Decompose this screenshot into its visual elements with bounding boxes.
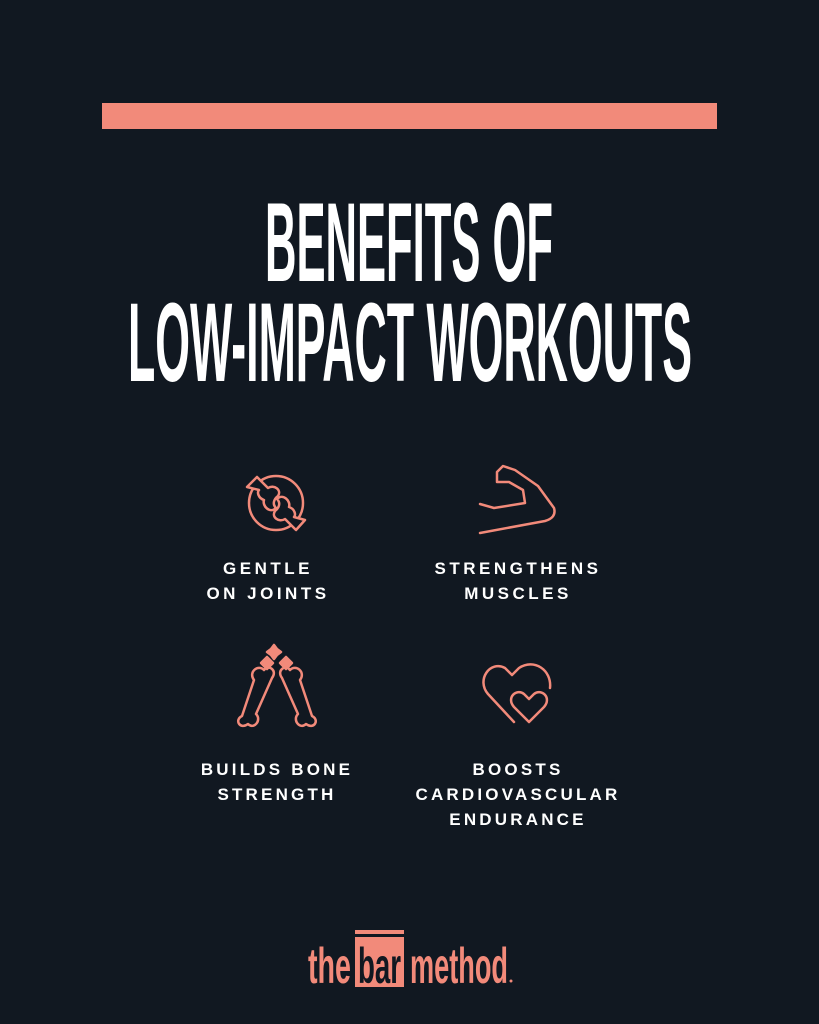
logo: bar	[358, 938, 401, 994]
logo: method	[410, 938, 508, 994]
icon: flexed arm	[480, 466, 555, 533]
logo: the	[308, 938, 351, 994]
labels: GENTLE	[223, 559, 313, 578]
logo	[308, 930, 512, 994]
labels: BOOSTS	[472, 760, 564, 779]
icon: joint	[247, 476, 305, 530]
labels: CARDIOVASCULAR	[415, 785, 621, 804]
labels: ENDURANCE	[449, 810, 587, 829]
title	[128, 180, 692, 405]
labels: STRENGTH	[217, 785, 337, 804]
labels	[201, 559, 621, 829]
icon: bones with sparkles	[238, 645, 316, 726]
icon: hearts	[483, 664, 550, 722]
labels: MUSCLES	[464, 584, 572, 603]
labels: STRENGTHENS	[435, 559, 601, 578]
top bar	[102, 103, 717, 129]
labels: BUILDS BONE	[201, 760, 353, 779]
labels: ON JOINTS	[206, 584, 330, 603]
